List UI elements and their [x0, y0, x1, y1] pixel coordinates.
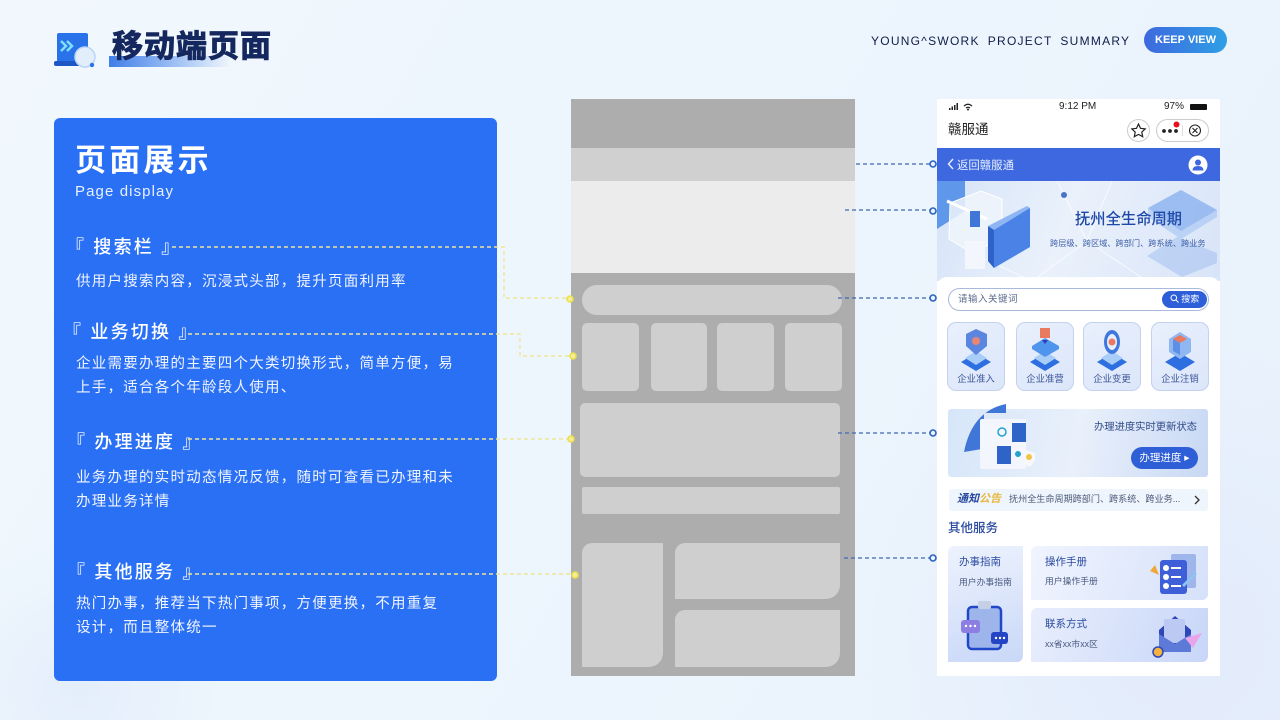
- wireframe: tile 3: [717, 323, 774, 391]
- wireframe: banner: [571, 181, 855, 273]
- search glyph: [1170, 294, 1179, 303]
- text: progress: [76, 469, 454, 510]
- text: business switch: [76, 355, 454, 396]
- label: 企业准入: [957, 373, 995, 384]
- service tile 2: [1016, 322, 1074, 391]
- battery icon: [1190, 104, 1207, 110]
- wireframe: service bottom: [675, 610, 840, 667]
- panel: page display: [54, 118, 497, 681]
- status icons left: [949, 103, 972, 110]
- text: business switch: 企业需要办理的主要四个大类切换形式，简单方便，易: [76, 356, 454, 372]
- progress art: [964, 404, 1035, 469]
- manual icon: [1150, 554, 1197, 594]
- wireframe: tile 4: [785, 323, 842, 391]
- app name: 赣服通: [948, 122, 988, 137]
- progress text: 办理进度实时更新状态: [1094, 422, 1197, 433]
- heading: progress: 『 办理进度 』: [67, 432, 203, 452]
- progress button: [1131, 447, 1198, 469]
- card text: 用户办事指南: [959, 577, 1012, 587]
- back link: 返回赣服通: [957, 160, 1014, 172]
- text: search bar: 供用户搜索内容，沉浸式头部，提升页面利用率: [76, 274, 407, 290]
- notice arrow: [1194, 496, 1200, 504]
- content sheet: [937, 277, 1220, 676]
- notice bar: [949, 489, 1208, 511]
- clock: 9:12 PM: [1059, 101, 1096, 112]
- user icon: [1188, 156, 1208, 174]
- keep view button: [1144, 27, 1227, 53]
- progress button: 办理进度 ▸: [1139, 452, 1190, 464]
- card: guide: [948, 546, 1023, 662]
- battery: 97%: [1164, 101, 1184, 112]
- banner title: 抚州全生命周期: [1075, 211, 1182, 228]
- wireframe: service top: [675, 543, 840, 599]
- service tile 3: [1083, 322, 1141, 391]
- wireframe: search: [582, 285, 842, 315]
- card title: 联系方式: [1045, 618, 1087, 630]
- text: progress: 业务办理的实时动态情况反馈，随时可查看已办理和未: [76, 470, 454, 486]
- notice text: 抚州全生命周期跨部门、跨系统、跨业务...: [1009, 494, 1180, 504]
- other services heading: 其他服务: [948, 521, 998, 535]
- header tagline: YOUNG^SWORK PROJECT SUMMARY: [871, 34, 1130, 48]
- star button: [1127, 119, 1150, 142]
- label: 企业变更: [1093, 373, 1131, 384]
- service tile 4: [1151, 322, 1209, 391]
- search button: 搜索: [1181, 294, 1199, 304]
- title: 移动端页面: [112, 29, 272, 64]
- icon: [1030, 328, 1060, 371]
- progress banner: [948, 409, 1208, 477]
- card text: xx省xx市xx区: [1045, 639, 1098, 649]
- banner: [937, 181, 1220, 281]
- wireframe: progress block: [580, 403, 840, 477]
- search box: [948, 288, 1209, 311]
- wireframe: [571, 99, 855, 676]
- text: other services: [76, 595, 438, 636]
- mail icon: [1152, 616, 1202, 658]
- wireframe: service tall: [582, 543, 663, 667]
- icon: [1097, 330, 1127, 371]
- keep view button: KEEP VIEW: [1155, 34, 1216, 46]
- panel subheading: Page display: [75, 183, 174, 200]
- text: business switch: 上手，适合各个年龄段人使用、: [76, 380, 296, 396]
- label: 企业准营: [1026, 373, 1064, 384]
- search button: [1162, 291, 1207, 308]
- clipboard icon: [961, 601, 1008, 650]
- card title: 操作手册: [1045, 556, 1087, 568]
- phone mockup: [937, 99, 1220, 676]
- card: manual: [1031, 546, 1208, 600]
- heading: business switch: 『 业务切换 』: [63, 322, 199, 342]
- panel heading: 页面展示: [75, 143, 212, 178]
- blue nav bar: [937, 148, 1220, 181]
- notice label: 通知公告: [957, 493, 1001, 505]
- wireframe: tile 2: [651, 323, 707, 391]
- heading: other services: 『 其他服务 』: [67, 562, 203, 582]
- text: progress: 办理业务详情: [76, 494, 170, 510]
- title underline: [109, 56, 231, 67]
- heading: search bar: 『 搜索栏 』: [66, 237, 181, 257]
- banner art: [937, 181, 1217, 277]
- card: contact: [1031, 608, 1208, 662]
- placeholder: 请输入关键词: [958, 294, 1018, 305]
- label: 企业注销: [1161, 373, 1199, 384]
- wireframe: notice: [582, 487, 840, 514]
- card text: 用户操作手册: [1045, 576, 1098, 586]
- icon: [961, 329, 991, 371]
- text: other services: 热门办事，推荐当下热门事项，方便更换，不用重复: [76, 596, 438, 612]
- service tile 1: [947, 322, 1005, 391]
- wireframe: nav bar: [571, 148, 855, 181]
- card title: 办事指南: [959, 556, 1001, 568]
- text: other services: 设计，而且整体统一: [76, 620, 218, 636]
- back chevron: [948, 158, 954, 170]
- status bar: [949, 101, 1207, 112]
- header icon: document with magnifier: [54, 33, 96, 68]
- icon: [1165, 332, 1195, 371]
- menu capsule: [1156, 119, 1209, 142]
- banner subtitle: 跨层级、跨区域、跨部门、跨系统、跨业务: [1050, 239, 1206, 248]
- wireframe: tile 1: [582, 323, 639, 391]
